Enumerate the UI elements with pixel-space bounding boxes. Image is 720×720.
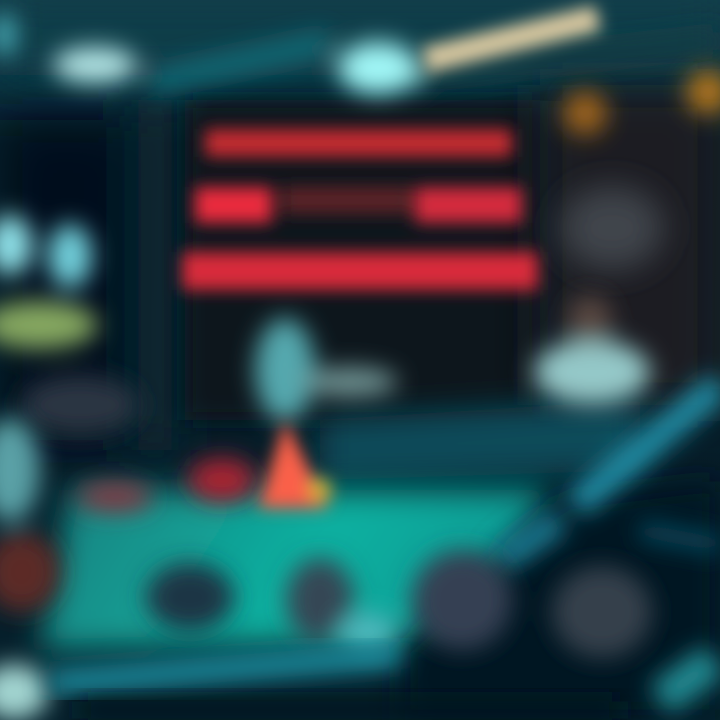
lower teal band [50, 655, 400, 683]
ceiling light streaks [0, 13, 720, 94]
teal diagonal streaks [500, 385, 720, 700]
right wall [540, 85, 720, 405]
dark board behind heading [185, 100, 540, 420]
dark table objects [146, 550, 652, 658]
teal console [320, 400, 640, 480]
cream ceiling strip [425, 18, 598, 60]
ceiling band [0, 0, 720, 75]
bottom dark strip [80, 700, 620, 720]
red cone [258, 420, 332, 508]
standing figure [255, 318, 398, 422]
left monitors [0, 215, 140, 435]
lower right dark foreground [400, 480, 720, 720]
red heading lines [182, 143, 538, 271]
grey wall panel [560, 186, 664, 270]
seated person [534, 296, 650, 404]
dark left wall [0, 100, 175, 450]
green table [40, 490, 550, 650]
bottom left shapes [0, 418, 60, 720]
red objects [77, 458, 256, 512]
orange lamps [563, 70, 720, 135]
